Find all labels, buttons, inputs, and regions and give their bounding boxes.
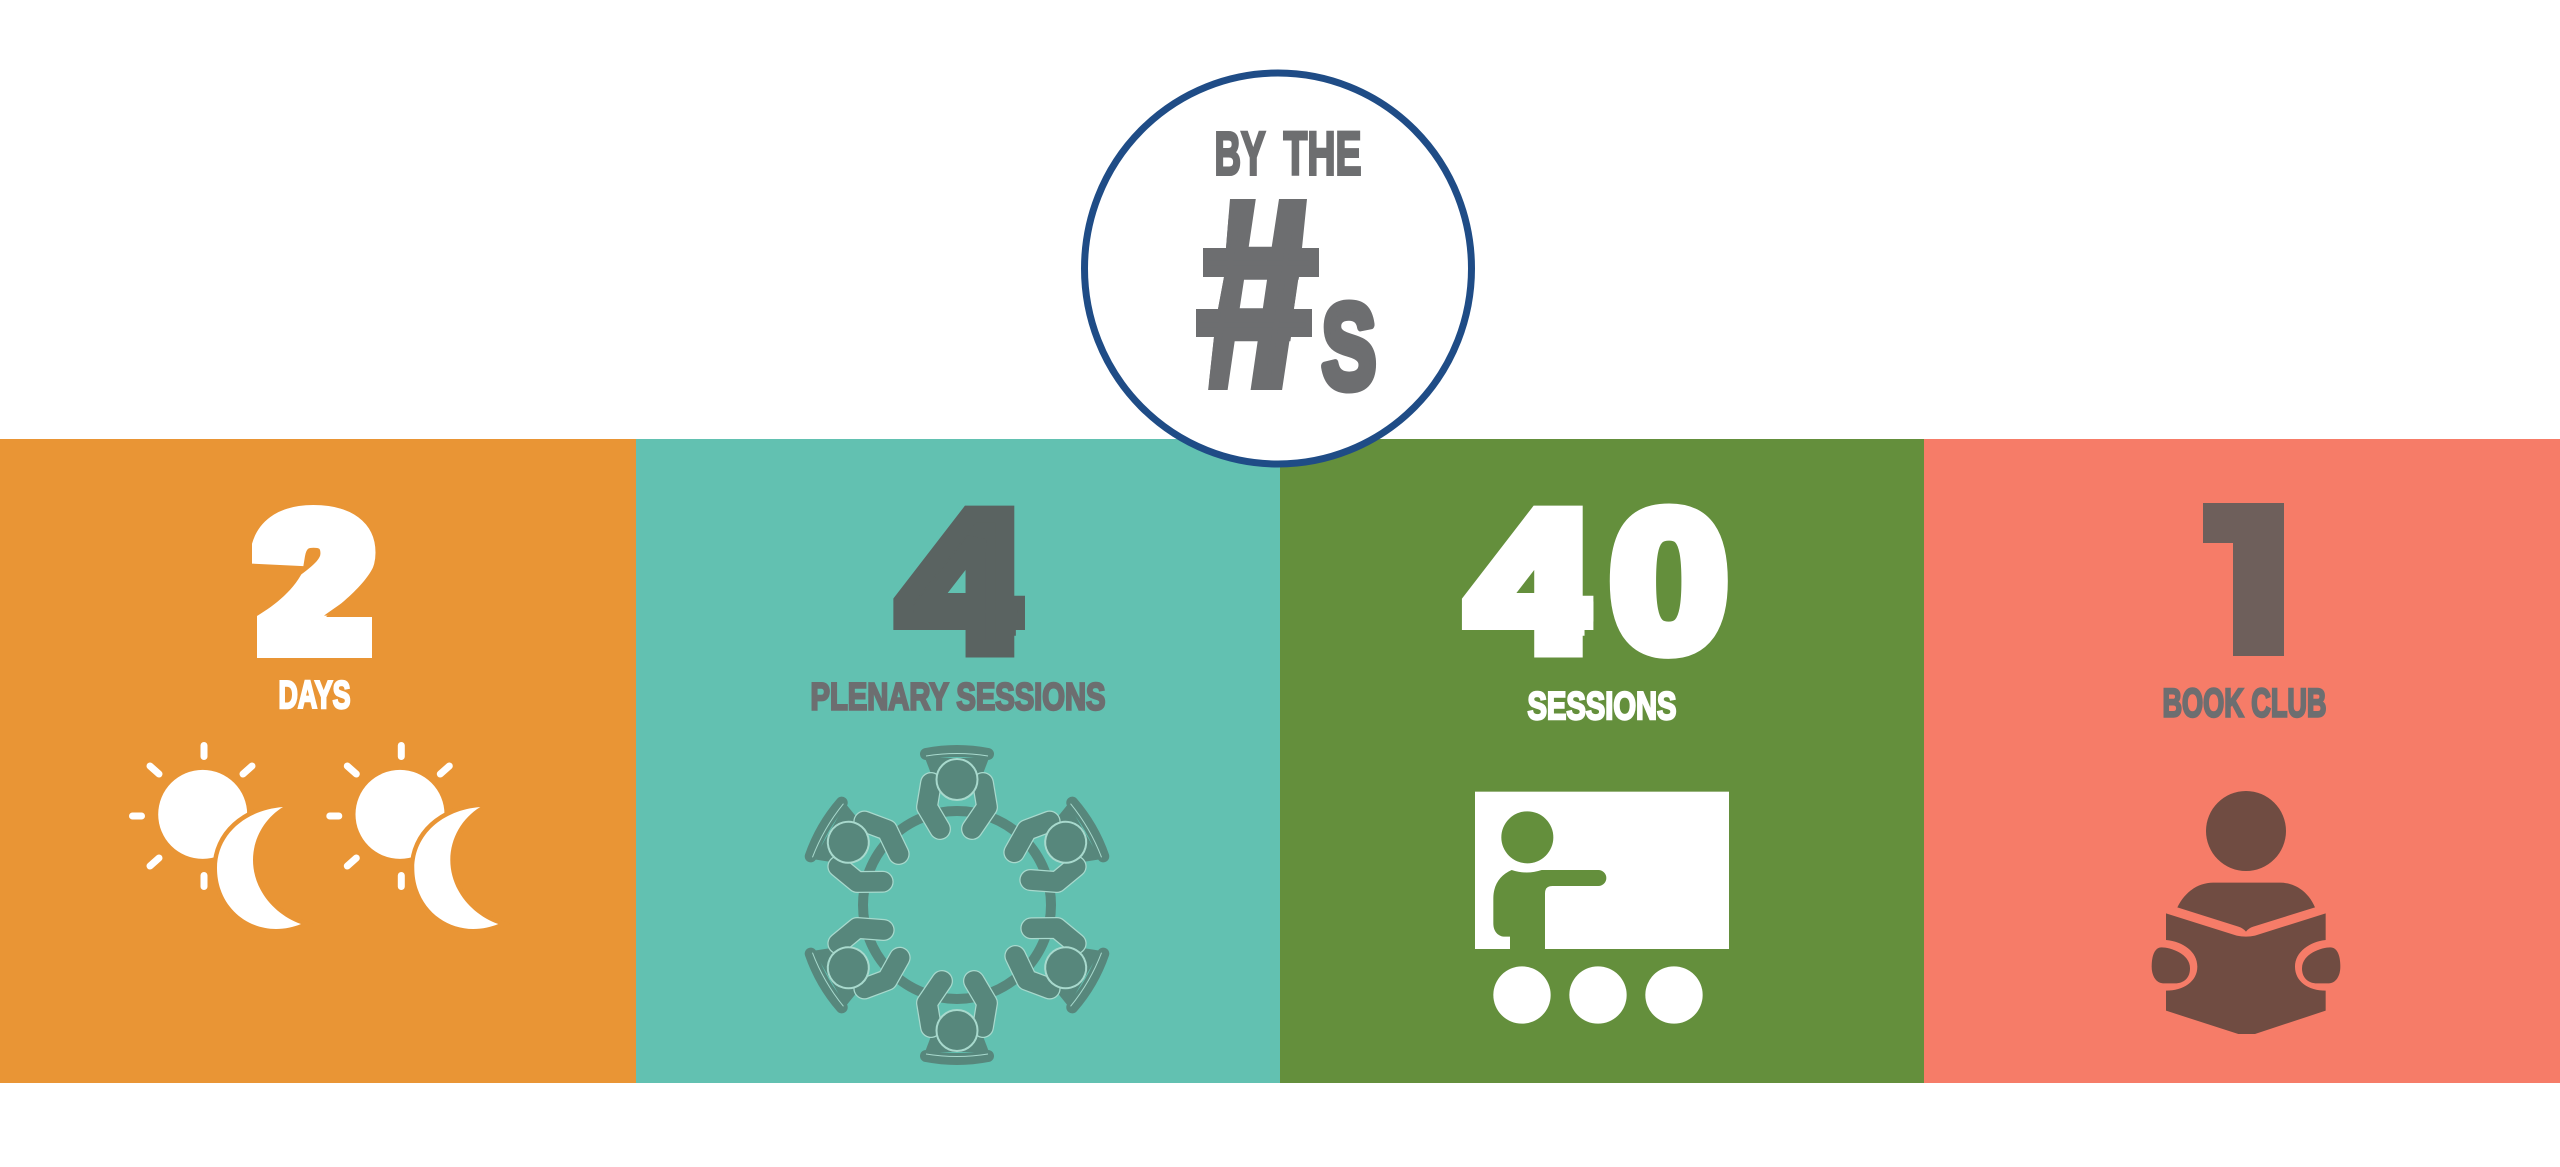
number: 1: 1 [2152,465,2334,694]
heading: by the: THE [1284,120,1362,188]
label: sessions: SESSIONS [1528,685,1676,728]
label: days: DAYS [278,674,350,717]
icon: six people around a table [808,751,1106,1059]
number: 40: 4 [1468,472,1597,691]
icon: presenter at a board with audience [1475,792,1729,1024]
icon: two suns and moons [132,746,498,929]
label: plenary sessions: PLENARY SESSIONS [810,676,1106,718]
number: 2: 2 [254,477,374,688]
label: book club: BOOK CLUB [2162,682,2326,726]
icon: person reading a book [2152,791,2340,1034]
heading: #: # [1180,147,1328,439]
number: 4: 4 [900,473,1028,691]
panel: 40 sessions [1280,439,1924,1083]
title badge: by the #s [1084,73,1472,464]
heading: s: S [1322,279,1376,414]
number: 40 [1462,504,1728,659]
panel: 1 book club [1924,439,2560,1083]
heading: by the: BY [1214,120,1266,188]
number: 40: 0 [1610,471,1728,691]
panel: 2 days [0,439,636,1083]
panel: 4 plenary sessions [636,439,1280,1083]
